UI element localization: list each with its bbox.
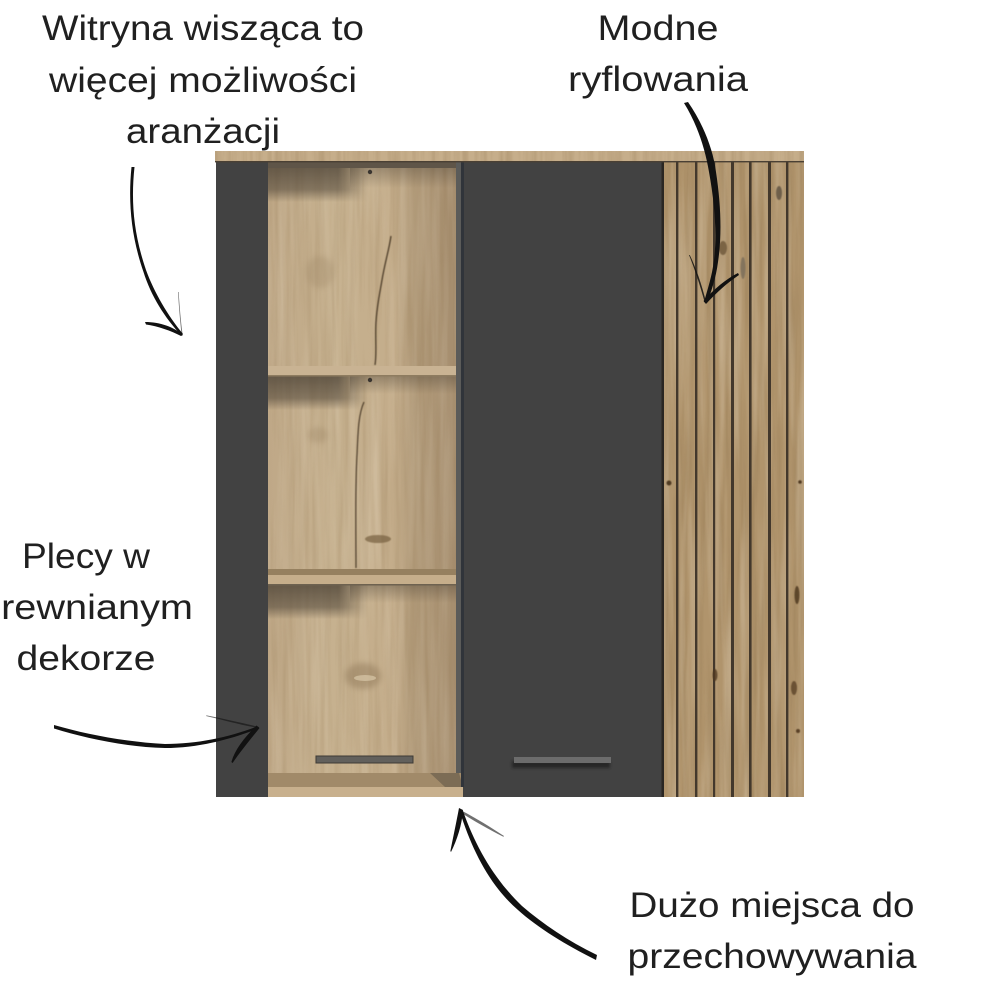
open shelving compartment [268, 162, 463, 775]
glass door handle [316, 756, 413, 763]
heading: storage space: przechowywania [628, 936, 917, 976]
heading: storage space [628, 885, 917, 976]
heading: wall display cabinet: aranżacji [126, 111, 280, 151]
door handle [512, 757, 611, 768]
heading: wall display cabinet [42, 8, 364, 151]
heading: wall display cabinet: więcej możliwości [48, 60, 357, 100]
cabinet illustration [215, 151, 804, 797]
heading: wooden back panel: Plecy w [22, 536, 150, 576]
bottom shelf [268, 773, 463, 797]
arrow: to fluted panel [684, 102, 739, 304]
heading: wooden back panel [0, 536, 193, 678]
heading: fluted panels: ryflowania [568, 59, 748, 99]
back panel cracks and knots [356, 236, 391, 568]
heading: fluted panels [568, 8, 748, 99]
heading: wooden back panel: dekorze [16, 638, 156, 678]
top board [215, 151, 804, 162]
heading: storage space: Dużo miejsca do [630, 885, 914, 925]
fluted wood panel [662, 162, 804, 797]
arrow: to left side panel [130, 167, 183, 336]
shelf 2 [268, 569, 456, 586]
heading: wall display cabinet: Witryna wisząca to [42, 8, 364, 48]
arrow: to storage shelf [450, 808, 597, 960]
arrow: to back panel [54, 715, 260, 763]
heading: fluted panels: Modne [598, 8, 718, 48]
left dark side panel [216, 162, 268, 797]
soft shelf shadows [268, 166, 368, 619]
shelf 1 [268, 366, 456, 376]
door [461, 162, 663, 797]
